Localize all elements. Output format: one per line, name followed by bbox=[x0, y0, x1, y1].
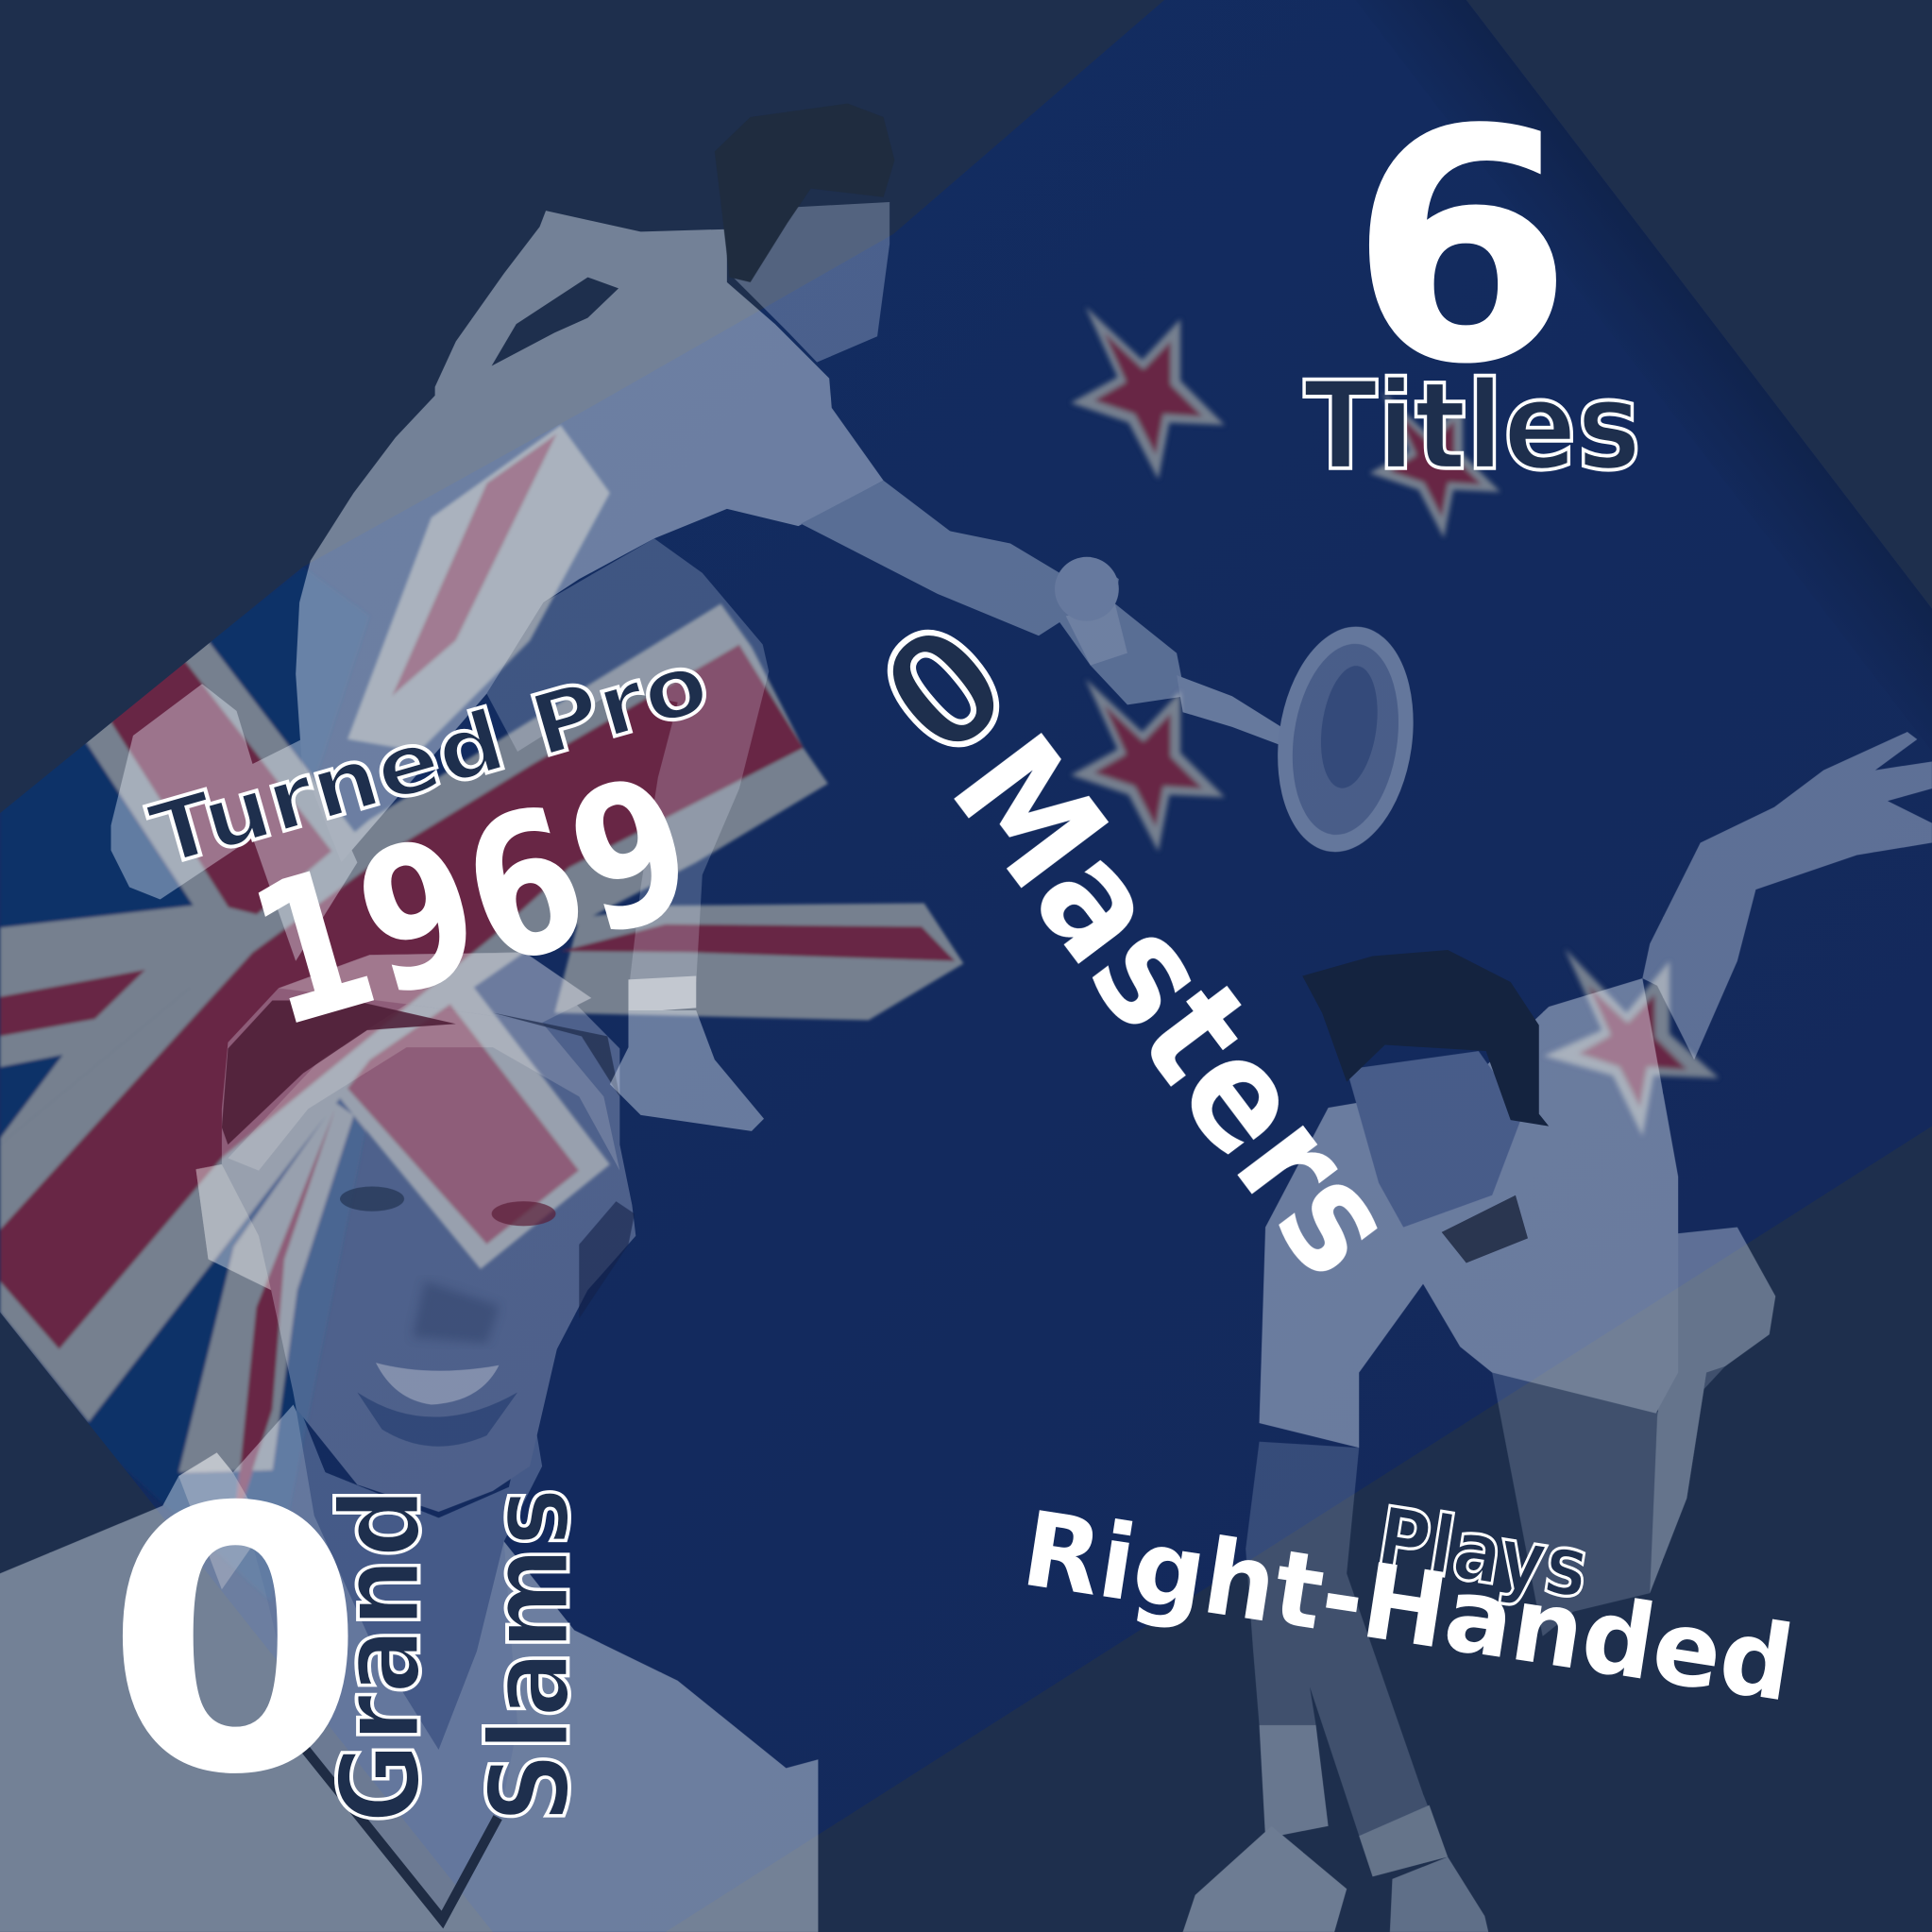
shirt bbox=[1260, 978, 1678, 1448]
label Masters: Masters bbox=[918, 704, 1432, 1307]
raised arm and hand bbox=[1642, 732, 1932, 1059]
back foot bbox=[1650, 1228, 1775, 1593]
icon: star 2 bbox=[1071, 679, 1225, 852]
legs bbox=[486, 538, 769, 982]
hair shade bbox=[222, 1001, 456, 1144]
stat: plays right-handed bbox=[1015, 1488, 1801, 1725]
racket bbox=[1177, 675, 1281, 745]
ball bbox=[1055, 557, 1119, 621]
stars bbox=[1071, 307, 1719, 1136]
shoe 2 bbox=[1390, 1856, 1488, 1932]
legs bbox=[1492, 1366, 1725, 1636]
face bbox=[1347, 1051, 1523, 1228]
shoe front bbox=[610, 1010, 764, 1131]
torso and shirt bbox=[296, 211, 884, 862]
stat: six titles bbox=[1304, 62, 1641, 498]
number 0 outlined: 0 bbox=[848, 588, 1043, 794]
eyes bbox=[340, 1187, 404, 1212]
sock bbox=[628, 975, 696, 1013]
hair bbox=[715, 104, 894, 282]
face bbox=[195, 953, 636, 1512]
label Grand: Grand bbox=[316, 1487, 446, 1823]
wrist band bbox=[1066, 603, 1127, 666]
neck shadow bbox=[1442, 1195, 1528, 1263]
icon: star 3 bbox=[1369, 391, 1500, 538]
stat: turned pro 1969 bbox=[140, 633, 720, 1072]
photo: leaping player bbox=[110, 104, 1427, 1131]
shirt bbox=[233, 1405, 574, 1917]
face bbox=[733, 202, 890, 363]
number 0: 0 bbox=[105, 1431, 366, 1854]
label Titles: Titles bbox=[1304, 356, 1641, 498]
sweater neck trim bbox=[306, 1750, 498, 1920]
value Right-Handed: Right-Handed bbox=[1015, 1488, 1801, 1725]
shirt gap bbox=[492, 278, 619, 366]
rear shoe bbox=[110, 684, 357, 961]
year 1969: 1969 bbox=[229, 733, 715, 1072]
wristband bbox=[1359, 1805, 1448, 1876]
label Slams: Slams bbox=[466, 1487, 595, 1823]
ear bbox=[195, 1164, 271, 1290]
label Turned Pro: Turned Pro bbox=[140, 633, 720, 886]
icon: star 1 bbox=[1071, 307, 1225, 480]
stat: zero masters bbox=[848, 588, 1432, 1307]
arm to racket bbox=[801, 481, 1185, 704]
mouth bbox=[357, 1392, 517, 1447]
photo: serving player bbox=[1183, 732, 1932, 1932]
neck bbox=[294, 1392, 542, 1750]
number 6: 6 bbox=[1349, 62, 1573, 435]
hair light bbox=[228, 1004, 619, 1171]
shoe bbox=[1183, 1826, 1347, 1932]
sweater bbox=[0, 1452, 818, 1932]
hair bbox=[1302, 950, 1549, 1127]
icon: star 4 bbox=[1544, 949, 1719, 1136]
photo: portrait player bbox=[0, 953, 818, 1932]
sock bbox=[1260, 1725, 1329, 1839]
stat: zero grand slams bbox=[105, 1431, 595, 1854]
canton: union jack bbox=[0, 425, 963, 1602]
collar bbox=[178, 1452, 251, 1589]
label Plays: Plays bbox=[1371, 1488, 1595, 1618]
